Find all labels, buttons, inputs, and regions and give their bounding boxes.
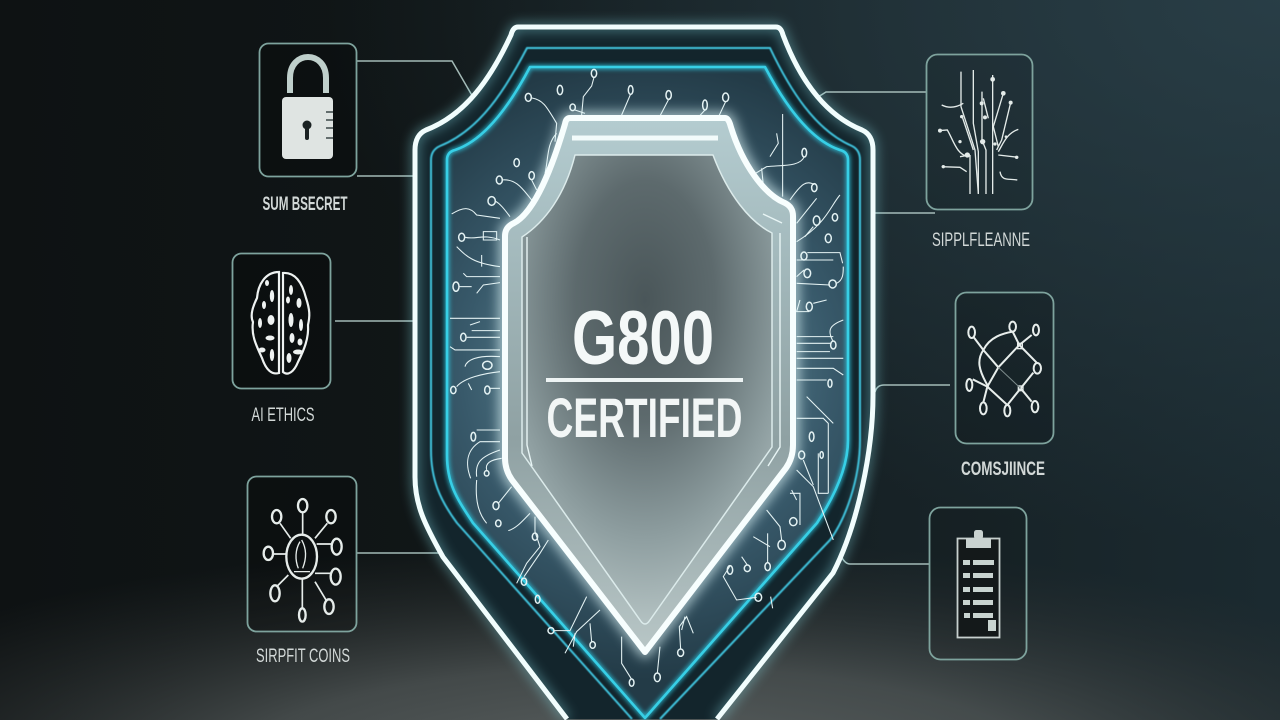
icon: clipboard checklist: [958, 530, 1000, 638]
outer shield: [415, 27, 873, 719]
label: node graph: COMSJIINCE: [961, 459, 1045, 480]
label: circuit tree: SIPPLFLEANNE: [932, 230, 1030, 251]
circuit traces lower half: [451, 368, 843, 686]
connector lines: [335, 61, 950, 564]
icon: circuit tree: [938, 70, 1018, 194]
circuit traces upper half: [450, 69, 843, 369]
panel: brain: [232, 254, 330, 388]
label: brain: AI ETHICS: [252, 405, 314, 426]
icon: padlock: [282, 57, 333, 159]
title: G800: G800: [572, 296, 714, 381]
icon: node graph: [966, 322, 1041, 416]
label: network: SIRPFIT COINS: [256, 646, 350, 667]
subtitle: CERTIFIED: CERTIFIED: [546, 386, 742, 449]
title divider: [546, 378, 743, 382]
band between shields: [447, 67, 848, 718]
thin cyan shield line: [431, 48, 860, 719]
panel: lock: [260, 44, 356, 176]
icon: brain: [252, 272, 309, 374]
inner shield: [505, 118, 793, 652]
panel: circuit tree: [926, 54, 1032, 210]
inner shield edge highlights: [527, 214, 782, 466]
label: lock: SUM BSECRET: [262, 194, 348, 215]
icon: hub network: [264, 499, 342, 622]
panel: node graph: [956, 292, 1054, 444]
panel: network: [248, 476, 356, 632]
inner shield face: [522, 155, 772, 624]
highlight bars: [572, 136, 718, 140]
panel: checklist: [930, 508, 1026, 660]
